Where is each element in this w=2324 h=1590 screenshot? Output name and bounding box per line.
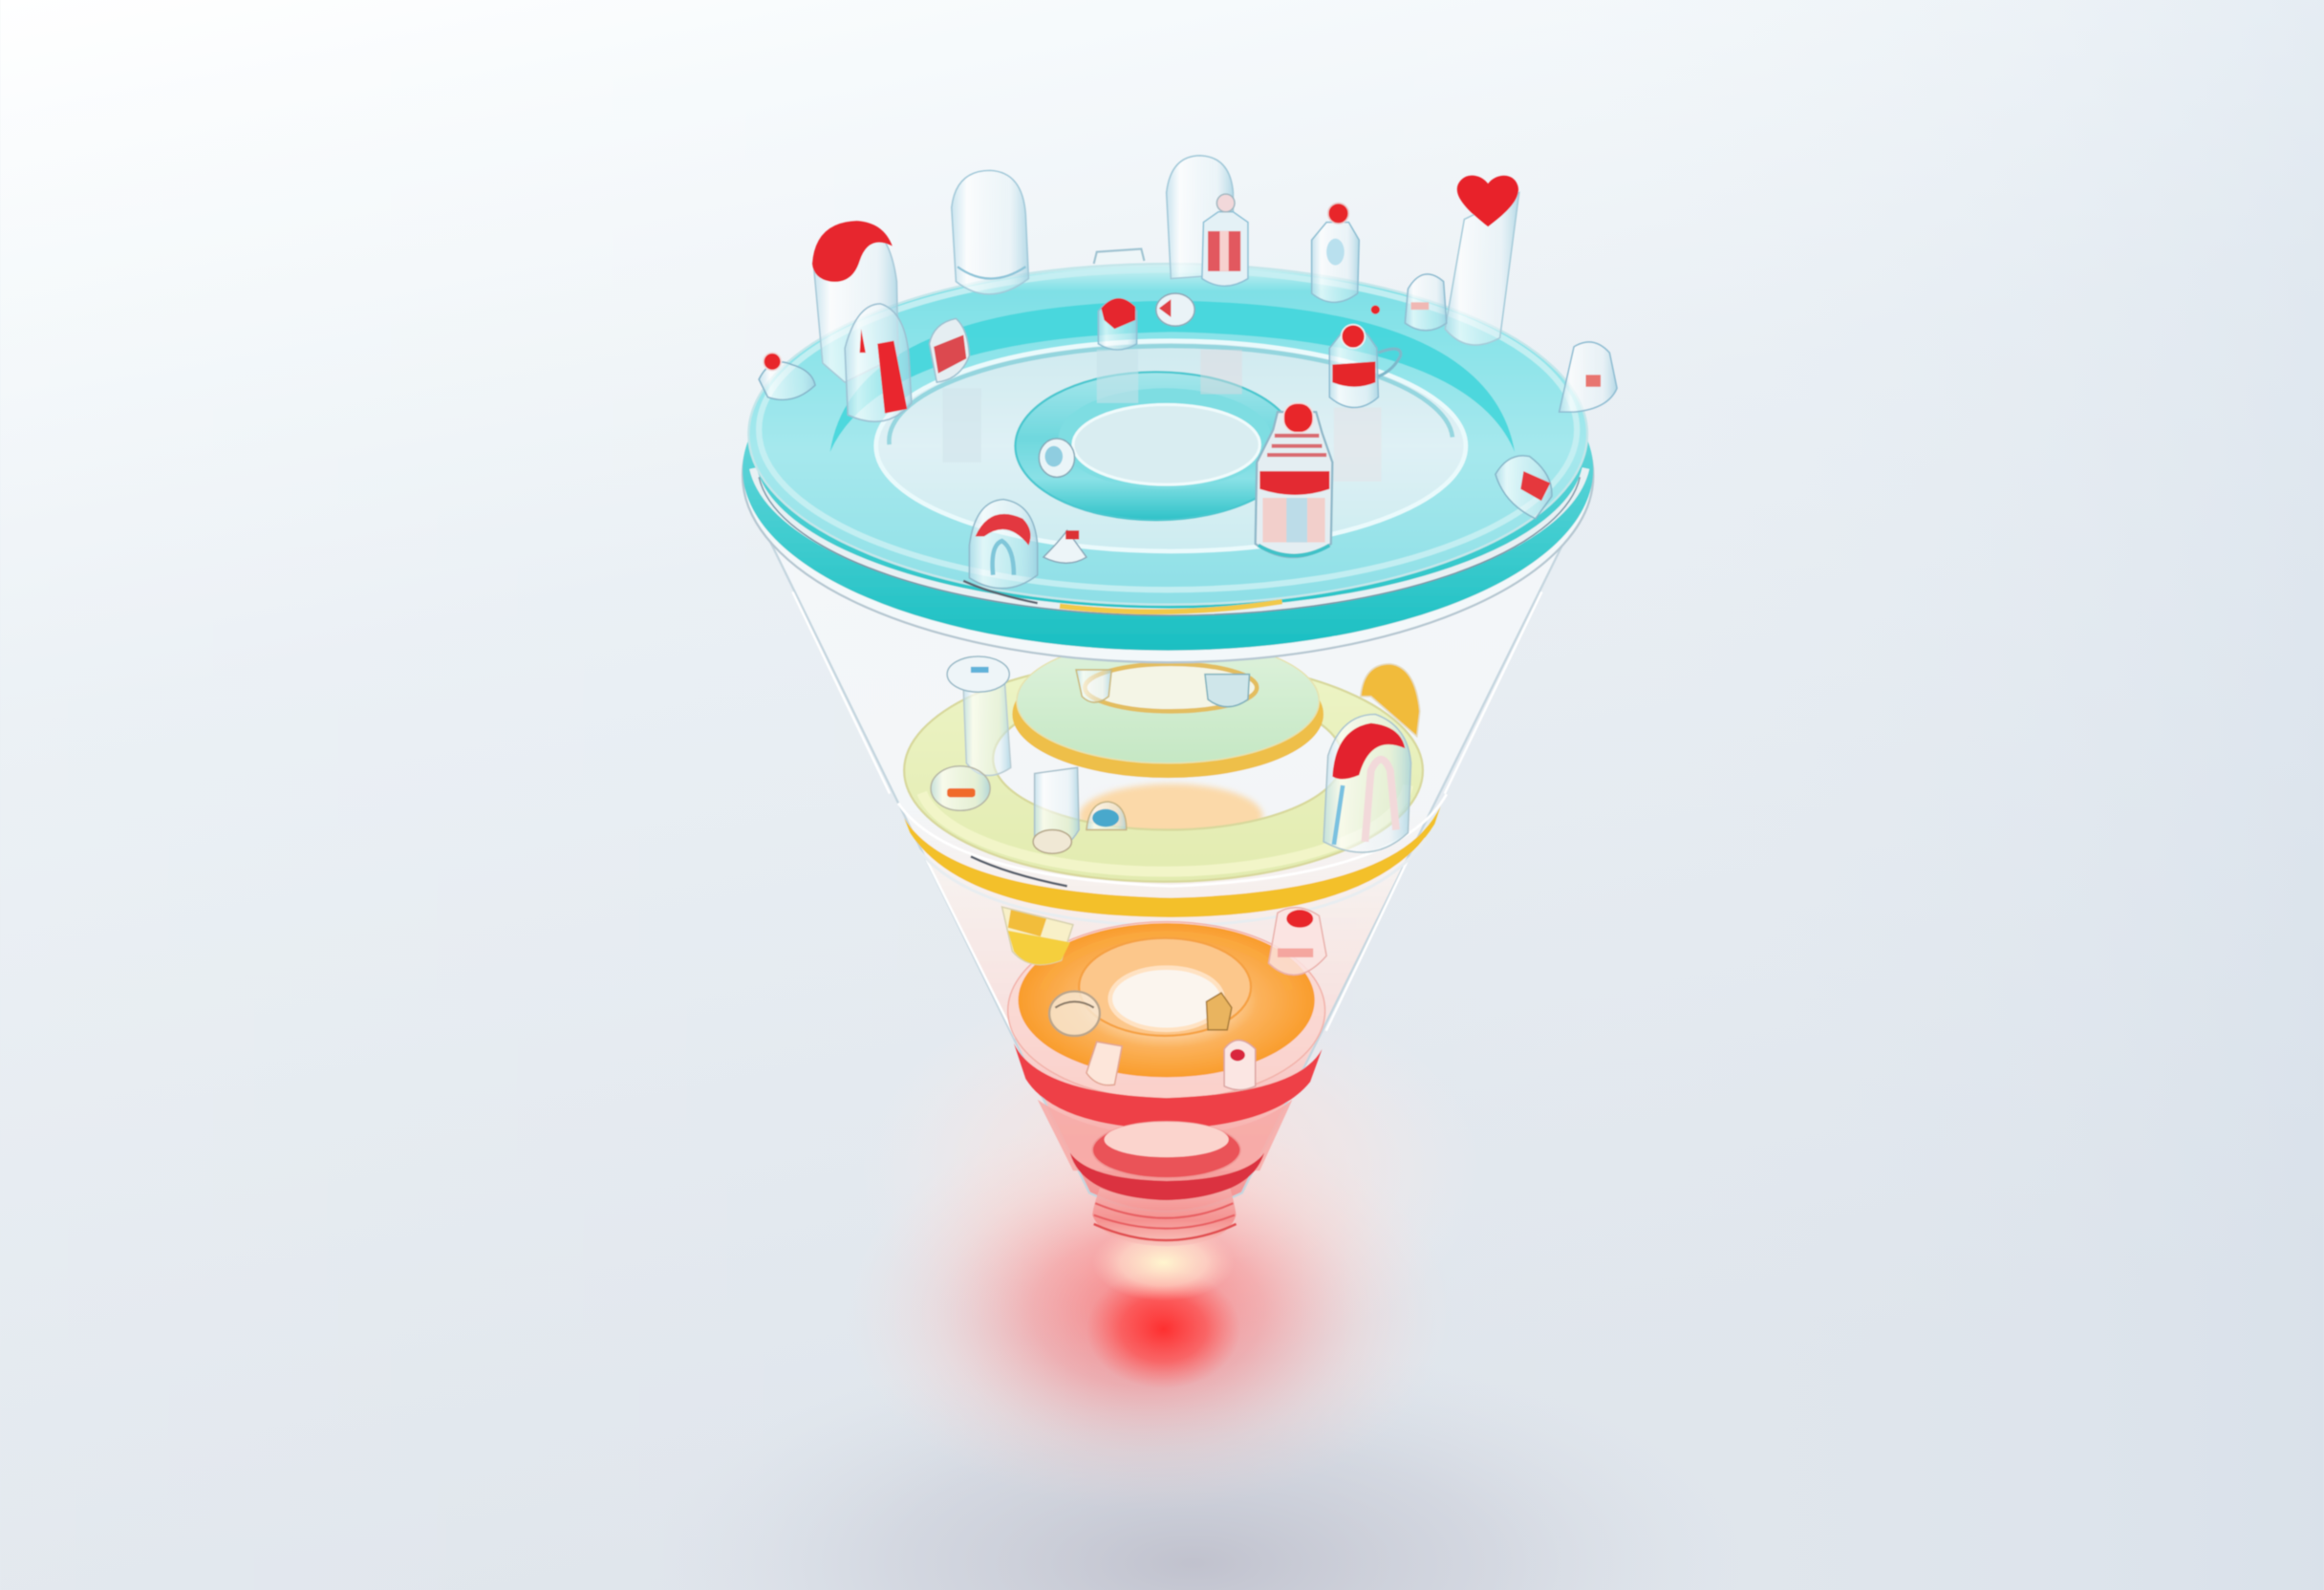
tall tube with heart xyxy=(1445,176,1519,345)
small red bottle, back xyxy=(1202,194,1248,286)
tier 4: red neck and foot xyxy=(1070,1122,1264,1246)
bright teal crescent on ring xyxy=(830,301,1515,452)
small vial, mint ring left xyxy=(1076,670,1111,702)
yellow block xyxy=(1002,907,1073,964)
silver line on rim xyxy=(753,468,1586,612)
big red bottle xyxy=(1256,403,1332,557)
clear capsule behind bottle xyxy=(1167,156,1233,279)
yellow capsule xyxy=(1361,664,1420,737)
amber bead xyxy=(1207,993,1232,1030)
blue dome on centre ring xyxy=(1039,439,1075,477)
lower teal rim xyxy=(742,289,1593,662)
right red vial xyxy=(1329,325,1401,407)
reflected colours on rim xyxy=(963,581,1282,612)
tier 2: mint upper ring xyxy=(1012,638,1323,778)
pink vial left xyxy=(1087,1042,1122,1085)
pink vial right xyxy=(1224,1041,1256,1090)
tiny red bead xyxy=(1371,305,1380,314)
objects inside the funnel xyxy=(931,656,1420,1090)
floor shadow xyxy=(637,1334,1749,1590)
glass cone body xyxy=(761,522,1574,1212)
red dot capsule xyxy=(1269,908,1326,975)
right rim dome xyxy=(1496,456,1552,519)
right edge ornament xyxy=(1560,342,1617,412)
U capsule with red stripe xyxy=(845,304,912,421)
red-top vial back xyxy=(1098,298,1137,350)
well reflections xyxy=(942,350,1382,482)
tier 1: cyan top disc xyxy=(742,264,1593,662)
blue dot dome xyxy=(1087,802,1127,829)
center small ring xyxy=(1015,372,1297,520)
red jar xyxy=(930,318,969,382)
heart xyxy=(1457,176,1518,226)
dome on orange ring xyxy=(1049,991,1100,1036)
mini dome with orange dot xyxy=(931,766,990,810)
clear capsule, mid left xyxy=(947,656,1011,776)
red-topped U capsule xyxy=(1323,714,1411,852)
clear tube, mid xyxy=(1033,767,1079,853)
front U capsule xyxy=(969,500,1038,589)
funnel xyxy=(742,156,1617,1246)
tier 4: red band xyxy=(1014,1043,1322,1171)
tier 2: pale yellow-green ring xyxy=(904,659,1423,882)
objects on the top disc xyxy=(759,156,1617,589)
clear capsule xyxy=(952,170,1028,294)
bookmark tile at back xyxy=(1094,249,1144,264)
tall capsule with red cap xyxy=(812,221,898,382)
tier 3: orange ring xyxy=(1008,922,1325,1100)
red glow on the floor xyxy=(845,978,1482,1512)
bottle with red ball xyxy=(1312,203,1359,302)
small tile xyxy=(1156,293,1194,326)
orange glow through tier 2 hole xyxy=(1079,784,1262,849)
left edge ornament xyxy=(759,353,815,399)
small glass jar xyxy=(1405,274,1447,331)
tier 2: yellow band xyxy=(898,794,1447,926)
inner well xyxy=(876,341,1466,551)
small vial, mint ring right xyxy=(1205,675,1249,707)
upper glass ring xyxy=(748,264,1587,605)
small front ornament xyxy=(1044,530,1087,563)
